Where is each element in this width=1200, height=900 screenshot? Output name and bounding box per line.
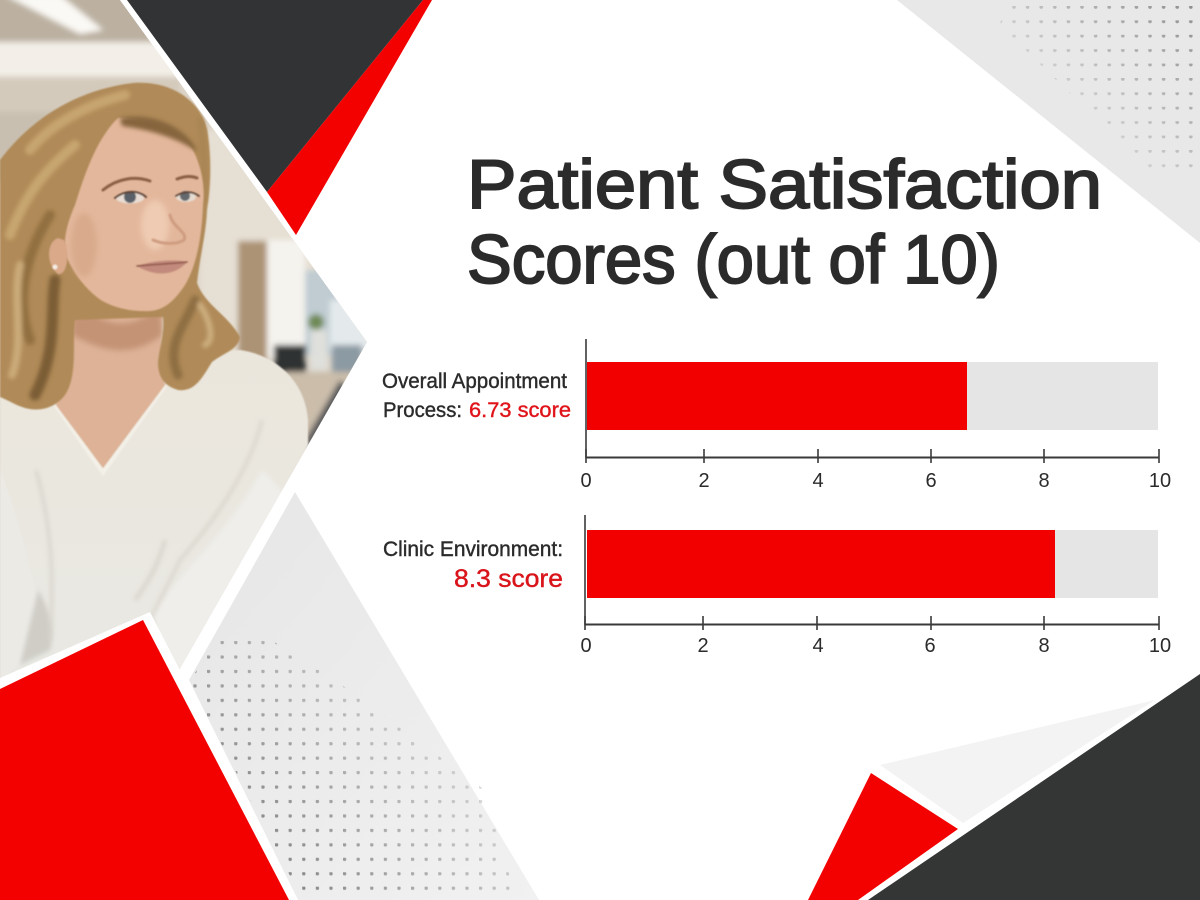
label: clinic environment (383, 538, 563, 593)
label: clinic environment: 8.3 score (454, 565, 563, 593)
panel: top right dotted grey triangle (897, 0, 1200, 243)
bar value 6.73 (587, 362, 967, 430)
panel: bottom left dotted grey triangle (189, 492, 539, 900)
axis (586, 339, 1159, 463)
panel: portrait photo of smiling woman (0, 0, 380, 700)
face shading (71, 117, 198, 277)
label: overall appointment process (382, 370, 571, 422)
title (467, 146, 1102, 298)
axis labels: 0 (580, 470, 592, 492)
axis labels (580, 635, 1171, 657)
axis labels: 10 (1149, 635, 1171, 657)
axis labels: 8 (1038, 470, 1050, 492)
bar track (587, 530, 1158, 598)
chart: clinic environment (383, 515, 1171, 657)
axis labels (580, 470, 1171, 492)
panel: top dark triangle (127, 0, 423, 192)
bar track (587, 362, 1158, 430)
hair back (0, 83, 240, 409)
panel: bottom right red triangle (808, 773, 958, 900)
panel: bottom right dark triangle (868, 674, 1200, 900)
hair shading (10, 95, 210, 395)
face (65, 118, 204, 311)
chart: overall appointment process (382, 339, 1171, 492)
sweater (0, 350, 308, 700)
axis labels: 2 (697, 635, 709, 657)
label: overall appointment process: Overall Appointment (382, 370, 567, 393)
axis labels: 4 (812, 635, 824, 657)
axis labels: 6 (925, 470, 937, 492)
axis labels: 2 (698, 470, 710, 492)
panel: bottom right pale triangle (880, 700, 1155, 823)
axis labels: 4 (812, 470, 824, 492)
ear (49, 238, 67, 274)
title: Patient Satisfaction (467, 146, 1102, 223)
neck and chest (56, 316, 166, 468)
panel: top red accent (267, 0, 432, 235)
label: clinic environment: Clinic Environment: (383, 538, 563, 561)
label: overall appointment process: Process: (383, 399, 462, 422)
title: Scores (out of 10) (467, 221, 1000, 298)
axis (585, 515, 1159, 630)
axis labels: 10 (1149, 470, 1171, 492)
label: overall appointment process: 6.73 score (469, 399, 571, 422)
axis labels: 0 (580, 635, 592, 657)
facial features (52, 177, 199, 273)
axis labels: 8 (1038, 635, 1050, 657)
axis labels: 6 (924, 635, 936, 657)
white edge line beside photo (120, 0, 303, 240)
panel: bottom left red block (0, 612, 298, 900)
bar value 8.3 (587, 530, 1055, 598)
